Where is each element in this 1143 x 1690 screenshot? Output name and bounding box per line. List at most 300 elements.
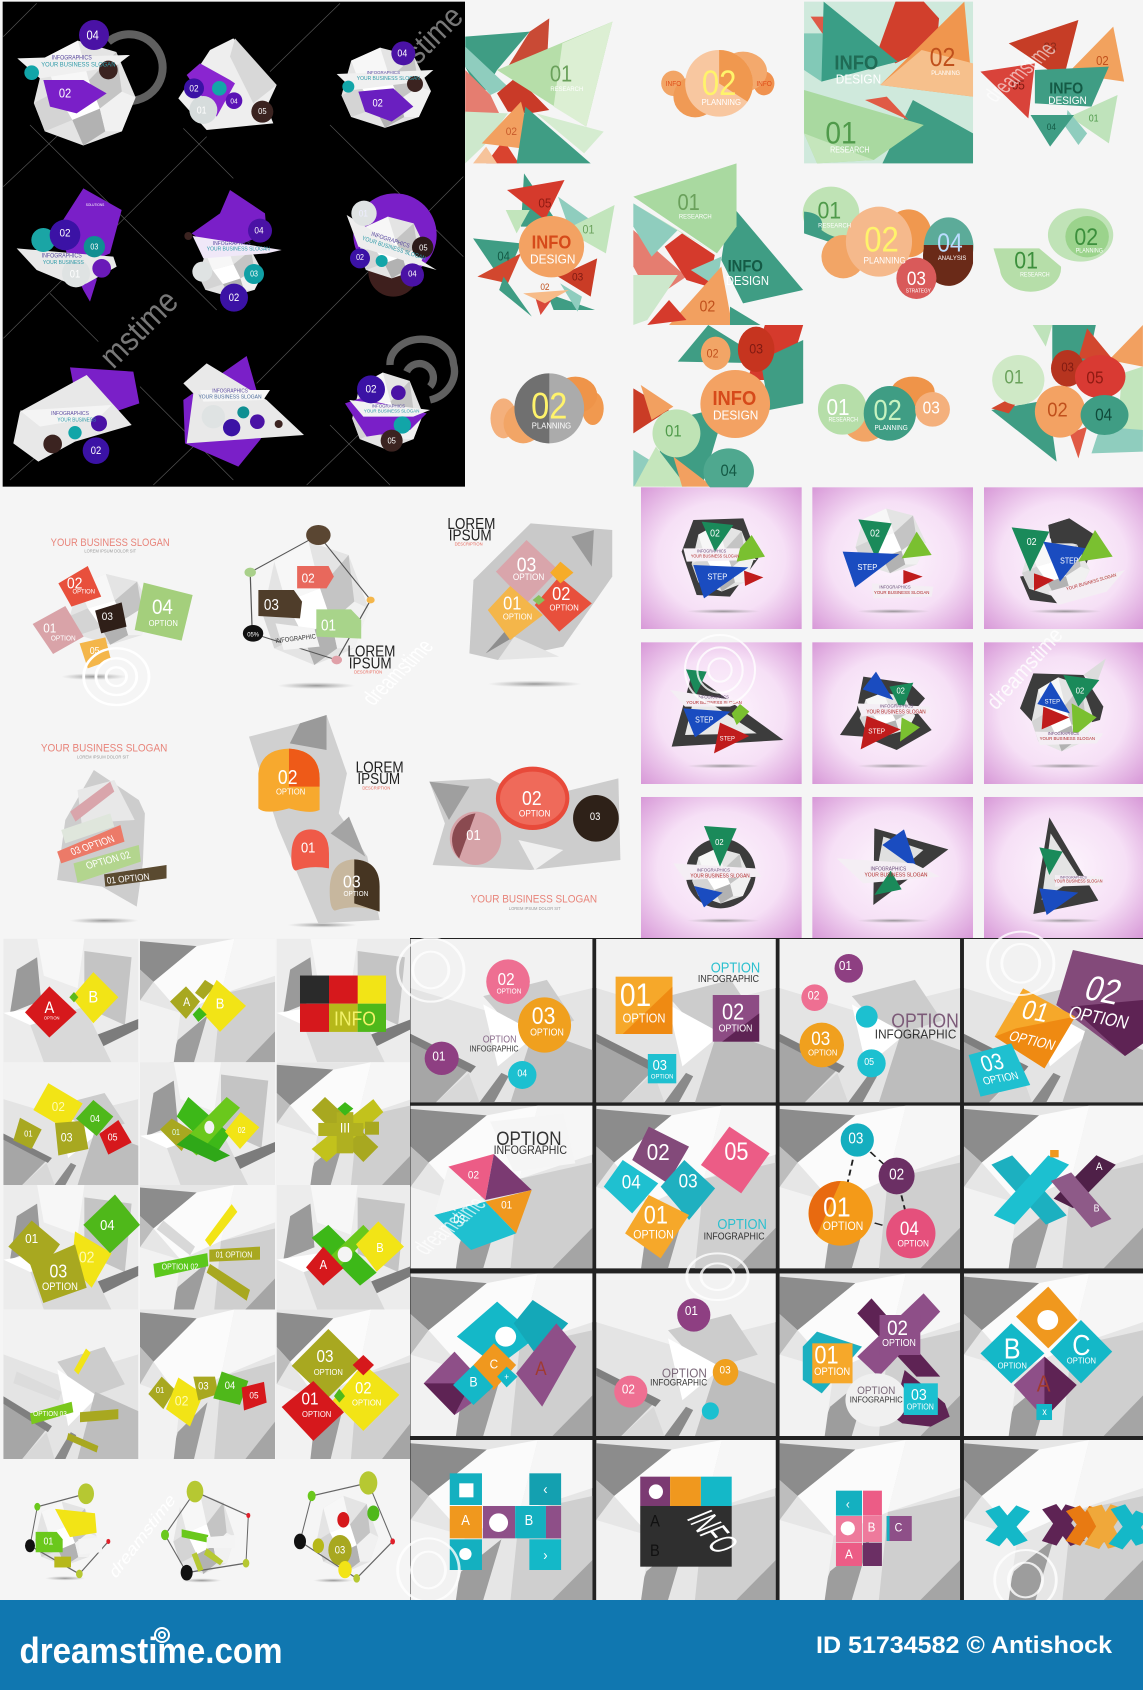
tile 1: triangles research: RESEARCH — [550, 86, 584, 93]
tile: circles pink orange: OPTION — [530, 1026, 564, 1037]
tile 4: info design scattered: INFO — [1049, 80, 1083, 98]
tile: circles pink orange: 01 — [432, 1049, 445, 1064]
tile 3: info design triangles: 02 — [930, 44, 955, 72]
group: orange badges: 01 — [301, 839, 315, 856]
cluster r1c1 — [682, 518, 765, 598]
cluster r3c2 — [837, 828, 948, 905]
bottom row networks: 01 — [43, 1535, 53, 1547]
tile: linked circles — [808, 1123, 935, 1258]
group: lorem ipsum diamonds: LOREM — [447, 516, 495, 533]
tile: linked circles: 01 — [823, 1191, 851, 1223]
tile: large olive green: 02 — [79, 1249, 94, 1267]
tile: pink block menu: C — [895, 1522, 902, 1535]
tile: scattered circles: 03 — [811, 1028, 830, 1049]
tile: squares 01 02 03: OPTION — [623, 1011, 665, 1026]
tile 10: info design circle and triangles: 04 — [721, 462, 737, 480]
cluster r2c2: 02 — [896, 686, 905, 695]
cluster 5: INFOGRAPHICS — [213, 241, 251, 247]
tile: squares 01 02 03: 02 — [722, 999, 744, 1025]
label 03: 03 — [977, 1048, 1007, 1077]
group: slogan squares: YOUR BUSINESS SLOGAN — [51, 538, 170, 549]
cluster r2c2: STEP — [868, 728, 885, 735]
logo wordmark: dreamstime.com — [20, 1630, 282, 1671]
tile 6: triangles info design: RESEARCH — [679, 213, 712, 220]
tile: squares 01 02 03 — [616, 959, 760, 1083]
cluster r1c2: INFOGRAPHICS — [879, 584, 911, 589]
group: slogan squares — [33, 538, 193, 680]
cluster 1: YOUR BUSINESS SLOGAN — [41, 61, 116, 69]
cluster r3c1 — [673, 826, 762, 908]
group: slogan squares: 01 — [43, 621, 56, 636]
cluster r1c3 — [1012, 518, 1125, 605]
tile: scattered circles: OPTION — [891, 1009, 959, 1032]
tile 10: info design circle and triangles — [633, 325, 803, 495]
tile: X with squares: 01 — [814, 1341, 839, 1369]
group: slogan squares: OPTION — [73, 588, 95, 595]
cluster r1c1: STEP — [707, 572, 728, 581]
tile 8: green circles — [993, 208, 1113, 292]
tile: row of x crosses — [992, 1507, 1143, 1547]
tile 11: circles 01 02 03 — [818, 377, 950, 442]
tile: diamonds A B C — [424, 1300, 576, 1415]
cluster 3: 02 — [372, 98, 383, 110]
cluster r2c3: INFOGRAPHICS — [1048, 731, 1079, 736]
group: hexagon network — [243, 525, 395, 689]
tile: small circles: OPTION — [662, 1366, 707, 1381]
cluster 5: 02 — [229, 293, 240, 304]
tile 9: gray planning circle — [490, 373, 604, 443]
tile: large olive green: 01 — [25, 1231, 38, 1246]
tile: diamonds with pie: OPTION — [1067, 1356, 1096, 1365]
tile: green cross: 02 — [238, 1126, 246, 1135]
tile: A B diamonds: OPTION — [44, 1015, 60, 1021]
cluster r2c3: STEP — [1045, 698, 1060, 705]
tile: diamonds A B C: A — [535, 1358, 547, 1379]
tile: scattered circles: 01 — [839, 958, 852, 973]
bottom row networks: 03 — [335, 1545, 346, 1557]
watermark diagonal: dreamstime — [979, 39, 1062, 106]
group: slogan squares: LOREM IPSUM DOLOR SIT — [84, 548, 136, 554]
tile: circles pink orange: INFOGRAPHIC — [470, 1044, 519, 1053]
tile 5: info design circle — [473, 173, 615, 317]
group: orange badges — [249, 715, 404, 928]
tile 4: info design scattered: 03 — [1044, 40, 1057, 55]
tile: linked circles: 03 — [848, 1131, 863, 1148]
tile: small squares row: 03 — [198, 1381, 209, 1393]
tile 2: planning circle: INFO — [666, 81, 682, 88]
tile 11: circles 01 02 03: RESEARCH — [828, 417, 858, 424]
tile: 01-05 squares: 02 — [52, 1099, 65, 1114]
tile: X with squares: 02 — [887, 1317, 908, 1340]
tile: INFO dark block: A — [650, 1513, 660, 1531]
tile: X with squares: OPTION — [814, 1367, 850, 1378]
tile: diamonds with pie: A — [1037, 1370, 1051, 1397]
tile 7: circles 01-04: PLANNING — [863, 255, 906, 265]
group: hexagon network: DESCRIPTION — [354, 669, 382, 674]
group: slogan squares: 04 — [152, 596, 173, 619]
tile: A B diamonds: A — [44, 999, 55, 1017]
tile: pink block menu: B — [868, 1520, 875, 1535]
cluster 6: INFOGRAPHICS — [370, 231, 411, 250]
tile 11: circles 01 02 03: PLANNING — [875, 425, 908, 432]
watermark text top right: dreamstime — [342, 0, 470, 127]
tile: diamonds with pie: B — [1004, 1333, 1021, 1365]
watermark spirals — [398, 1253, 1056, 1610]
tile 5: info design circle: DESIGN — [530, 252, 575, 267]
tile 11: circles 01 02 03: 01 — [826, 394, 850, 420]
tile 3: info design triangles: DESIGN — [836, 72, 881, 87]
tile 3: info design triangles: PLANNING — [931, 71, 960, 77]
cluster r2c1: YOUR BUSINESS SLOGAN — [686, 700, 742, 705]
tile: five tilted squares: 03 — [679, 1170, 698, 1192]
tile 12: circles on triangles: 01 — [1004, 365, 1024, 388]
tile: diamonds with pie: x — [1042, 1405, 1047, 1417]
tile: large olive green: OPTION — [42, 1282, 78, 1293]
cluster r1c1: YOUR BUSINESS SLOGAN — [691, 553, 739, 558]
tile 8: green circles: 02 — [1074, 223, 1098, 250]
tile backgrounds rows 1 2 — [410, 939, 1143, 1268]
tile: green cross: 01 — [172, 1128, 180, 1137]
cluster 4: 02 — [59, 227, 71, 240]
group: lorem ipsum diamonds: OPTION — [503, 612, 532, 621]
tile: INFO color grid: INFO — [334, 1007, 376, 1030]
cluster r2c2 — [840, 672, 932, 750]
tile: faded strips: OPTION 03 — [33, 1411, 67, 1418]
cluster 7: INFOGRAPHICS — [51, 411, 89, 417]
spiral watermark bottom — [390, 339, 454, 400]
tile: pinwheel: 01 — [501, 1199, 512, 1212]
tile 12: circles on triangles — [991, 325, 1143, 462]
watermark spiral — [84, 648, 149, 705]
tile: pinwheel: 02 — [468, 1169, 479, 1182]
tile: 01-05 squares: 04 — [90, 1112, 100, 1124]
tile: small circles: 03 — [720, 1364, 731, 1377]
tile 3: info design triangles: 01 — [825, 116, 857, 151]
cluster r1c1: INFOGRAPHICS — [697, 548, 726, 554]
group: stacked ribbons: YOUR BUSINESS SLOGAN — [41, 742, 167, 755]
cluster 2: 05 — [258, 107, 267, 116]
cluster r2c3: 02 — [1076, 686, 1085, 695]
tile: scattered circles: 05 — [864, 1055, 874, 1067]
pink tile backgrounds — [641, 487, 1143, 939]
tile: INFO dark block — [640, 1477, 747, 1567]
tile 3: info design triangles: RESEARCH — [830, 145, 869, 155]
footer banner — [0, 1600, 1143, 1690]
tile: big diamonds 01 02 03: OPTION — [352, 1398, 381, 1407]
cluster 5: 03 — [250, 269, 258, 279]
tile: circles pink orange: 02 — [498, 970, 515, 989]
tile: scattered circles — [799, 954, 959, 1077]
tile: large olive green: 03 — [50, 1261, 67, 1282]
tile 7: circles 01-04: 02 — [864, 221, 899, 260]
tile: X with squares: INFOGRAPHIC — [850, 1395, 903, 1405]
tile 4: info design scattered: 02 — [1096, 53, 1109, 68]
tile 2: planning circle: INFO — [756, 81, 772, 88]
group: hexagon network: IPSUM — [349, 656, 392, 673]
cluster 5 — [184, 190, 282, 312]
label 01 option: OPTION — [1006, 1028, 1058, 1053]
tile: circles pink orange: OPTION — [497, 988, 521, 995]
tile 7: circles 01-04: 04 — [937, 229, 963, 258]
cluster 2: 01 — [197, 104, 207, 115]
tile: X with squares — [803, 1293, 950, 1427]
tiles rows three and four — [398, 1253, 1143, 1610]
tile 7: circles 01-04: RESEARCH — [818, 222, 851, 229]
group: lorem ipsum diamonds: 02 — [552, 583, 570, 604]
cluster r1c3: STEP — [1060, 556, 1079, 565]
tile: squares 01 02 03: 03 — [653, 1056, 667, 1073]
group: hexagon network: INFOGRAPHIC — [275, 633, 317, 645]
tile: INFO color grid — [300, 976, 386, 1032]
tile: x cross: A — [1096, 1160, 1103, 1173]
panel: purple infographics on black — [3, 0, 470, 487]
group: lorem ipsum diamonds: DESCRIPTION — [455, 541, 483, 546]
cluster 3: YOUR BUSINESS SLOGAN — [357, 76, 420, 82]
tile 12: circles on triangles: 05 — [1086, 369, 1104, 388]
cluster r2c1 — [670, 669, 783, 753]
cluster 1: 04 — [86, 28, 99, 43]
dark tile gutters — [410, 938, 1143, 1600]
tile 2: planning circle — [661, 50, 774, 117]
tile: pinwheel: 03 — [453, 1214, 465, 1227]
cluster 8 — [183, 356, 304, 467]
tile: A B diamonds — [25, 972, 118, 1038]
group: red circles — [429, 767, 620, 911]
tile: X with squares: OPTION — [857, 1384, 895, 1397]
cluster 8: YOUR BUSINESS SLOGAN — [198, 394, 262, 400]
tile: five tilted squares — [604, 1127, 770, 1258]
watermark spiral — [685, 635, 755, 705]
tile 5: info design circle: 02 — [540, 282, 550, 292]
tile: tilted squares: 02 — [1079, 969, 1127, 1013]
tile: A B pie cross: B — [376, 1240, 384, 1255]
group: hexagon network: 05% — [247, 631, 259, 639]
tile 4: info design scattered: 01 — [1089, 113, 1099, 125]
panel: pink tiles with colored triangles — [641, 487, 1143, 939]
tile: 01-05 squares: 01 — [24, 1129, 33, 1139]
tile: option strips — [153, 1204, 260, 1301]
tile 2: planning circle: PLANNING — [702, 98, 741, 107]
tile 6: triangles info design: INFO — [728, 258, 763, 276]
cluster r3c1: INFOGRAPHICS — [697, 867, 730, 873]
tile: 01-05 squares: 03 — [61, 1132, 73, 1145]
tile: small squares row: 01 — [156, 1386, 165, 1395]
tile: small squares row: 02 — [175, 1393, 189, 1409]
tile 10: info design circle and triangles: 03 — [749, 341, 763, 357]
watermark diagonal: dreamstime — [982, 623, 1068, 714]
group: slogan squares: 05 — [90, 644, 100, 656]
tile: big diamonds 01 02 03: OPTION — [314, 1368, 343, 1377]
cluster 3: 04 — [397, 47, 407, 59]
tile 10: info design circle and triangles: DESIGN — [713, 408, 758, 423]
cluster 9: INFOGRAPHICS — [372, 403, 405, 408]
cluster r2c1: STEP — [720, 735, 735, 743]
tile: diamonds with pie — [980, 1287, 1112, 1420]
tile 9: gray planning circle: 02 — [531, 387, 567, 427]
group: orange badges: 02 — [278, 766, 298, 788]
tile 12: circles on triangles: 03 — [1061, 360, 1074, 375]
cluster r1c1: 02 — [710, 527, 720, 539]
tile 5: info design circle: INFO — [532, 231, 571, 253]
group: hexagon network: LOREM — [347, 644, 395, 661]
tile: teal block menu — [450, 1473, 561, 1570]
tile: large olive green — [8, 1195, 140, 1303]
tile: X with squares: 03 — [911, 1386, 927, 1404]
cluster 2: 04 — [230, 98, 238, 105]
tile: A B pie cross — [306, 1221, 404, 1286]
cluster 2 — [178, 38, 277, 130]
tile: linked circles: 02 — [889, 1167, 904, 1184]
tile 1: triangles research: 01 — [550, 62, 572, 87]
group: red circles: 02 — [522, 787, 542, 809]
group: slogan squares: 03 — [102, 610, 113, 623]
tile: small circles: 02 — [622, 1382, 635, 1397]
tile: diamonds A B C: C — [490, 1357, 498, 1372]
panel: yellow green red gray tiles — [3, 939, 412, 1583]
tile 6: triangles info design: 01 — [677, 190, 700, 215]
tile 6: triangles info design — [633, 163, 803, 325]
group: orange badges: DESCRIPTION — [362, 785, 390, 790]
cluster 6 — [347, 193, 437, 297]
cluster 1: INFOGRAPHICS — [52, 55, 92, 61]
tile: small squares row — [148, 1371, 267, 1427]
tiles rows one and two — [398, 932, 1143, 1268]
tile: small circles — [614, 1298, 738, 1420]
tile: big diamonds 01 02 03: OPTION — [302, 1410, 331, 1419]
tile: small squares row: 04 — [225, 1380, 236, 1392]
tile: A B pie cross: A — [320, 1257, 327, 1272]
tile: pink block menu — [836, 1491, 912, 1566]
panel: green-orange-red paper shapes — [465, 2, 1143, 495]
cluster 8: INFOGRAPHICS — [212, 388, 248, 395]
tile 6: triangles info design: DESIGN — [726, 273, 769, 288]
tile: diamonds with pie: OPTION — [998, 1361, 1027, 1370]
cluster r2c3 — [1020, 658, 1106, 751]
tile: circles pink orange: OPTION — [483, 1033, 517, 1045]
cluster 6: 05 — [419, 243, 428, 253]
tile: five tilted squares: 05 — [724, 1138, 749, 1165]
tile: pinwheel — [434, 1113, 575, 1250]
cluster 4: SOLUTIONS — [86, 203, 105, 207]
cluster r3c3: INFOGRAPHICS — [1060, 875, 1087, 879]
tile: teal block menu: B — [525, 1511, 533, 1528]
group: hexagon network: 02 — [302, 571, 315, 586]
cluster 4: YOUR BUSINESS — [43, 260, 84, 266]
cluster r1c2 — [843, 508, 933, 598]
group: red circles: OPTION — [519, 808, 550, 819]
group: slogan squares: OPTION — [51, 635, 76, 643]
tile: big diamonds 01 02 03: 01 — [302, 1390, 318, 1409]
cluster 9: YOUR BUSINESS SLOGAN — [364, 408, 419, 414]
group: stacked ribbons: LOREM IPSUM DOLOR SIT — [77, 754, 129, 760]
group: lorem ipsum diamonds: OPTION — [513, 572, 544, 582]
image credit: ID 51734582 © Antishock — [816, 1632, 1113, 1659]
cluster 9: 05 — [387, 436, 396, 445]
watermark spiral — [398, 932, 1054, 1002]
cluster 7: YOUR BUSINESS — [57, 417, 97, 424]
tile: A B diamonds: B — [88, 988, 98, 1007]
tile: x cross: B — [1094, 1202, 1100, 1214]
tile: scattered circles: INFOGRAPHIC — [875, 1027, 956, 1042]
tile: olive A yellow B: A — [183, 997, 191, 1009]
tile: scattered circles: 02 — [808, 990, 820, 1003]
tile 12: circles on triangles: 02 — [1047, 399, 1068, 422]
tile: olive cross — [312, 1097, 383, 1162]
tile: diamonds with pie: C — [1072, 1330, 1091, 1361]
group: red circles: 03 — [590, 812, 601, 823]
tile 3: info design triangles — [804, 2, 973, 163]
cluster 4 — [17, 188, 122, 302]
tile: five tilted squares: 02 — [647, 1139, 670, 1165]
cluster 3 — [337, 41, 433, 128]
tile 10: info design circle and triangles: 01 — [665, 423, 682, 441]
tile 4: info design scattered — [980, 20, 1124, 147]
tile 11: circles 01 02 03: 03 — [923, 399, 940, 418]
cluster r2c2: YOUR BUSINESS SLOGAN — [866, 709, 926, 715]
tile: big diamonds 01 02 03 — [282, 1329, 399, 1441]
cluster r1c3: 02 — [1027, 535, 1037, 547]
tile: linked circles: OPTION — [823, 1220, 863, 1233]
ribbon label 02: OPTION 02 — [84, 850, 132, 872]
tile 5: info design circle: 01 — [583, 224, 594, 237]
tile: small circles: 01 — [685, 1303, 698, 1318]
group: lorem ipsum diamonds: 03 — [517, 554, 536, 576]
tile 7: circles 01-04: STRATEGY — [906, 288, 931, 294]
tile: squares 01 02 03: OPTION — [711, 959, 760, 976]
logo spiral icon — [155, 1628, 169, 1642]
group: lorem ipsum diamonds: 01 — [503, 592, 521, 614]
tile 6: triangles info design: 02 — [699, 298, 715, 316]
cluster r3c1: YOUR BUSINESS SLOGAN — [690, 873, 750, 879]
cluster 9: 02 — [365, 383, 377, 396]
tile: diamonds A B C: + — [504, 1372, 509, 1382]
watermark diagonal: dreamstime — [106, 1489, 178, 1582]
group: orange badges: 03 — [343, 871, 361, 892]
tile 3: info design triangles: INFO — [834, 51, 878, 75]
cluster r2c1: STEP — [695, 715, 714, 725]
tile: pink block menu: ‹ — [846, 1497, 850, 1512]
tile: linked circles: OPTION — [897, 1238, 929, 1249]
tile: small circles: INFOGRAPHIC — [650, 1377, 707, 1387]
cluster 5: 04 — [254, 225, 264, 235]
panel: business slogan paper shapes — [33, 516, 620, 928]
tile 7: circles 01-04: ANALYSIS — [938, 255, 966, 262]
slogan: YOUR BUSINESS SLOGAN — [361, 236, 426, 262]
tile: circles pink orange — [425, 959, 571, 1089]
cluster 1: 02 — [59, 86, 72, 101]
tile: pinwheel: INFOGRAPHIC — [494, 1144, 567, 1157]
tile 8: green circles: PLANNING — [1076, 248, 1103, 254]
gray low-poly tile backgrounds — [3, 939, 412, 1459]
cluster 2: 02 — [189, 83, 199, 94]
cluster 7: 02 — [91, 446, 102, 457]
tile: teal block menu: › — [543, 1546, 548, 1563]
cluster 9 — [345, 372, 430, 452]
cluster r2c1: INFOGRAPHICS — [698, 694, 729, 699]
tile: olive A yellow B — [170, 980, 246, 1032]
group: lorem ipsum diamonds: OPTION — [549, 603, 579, 613]
tile 8: green circles: 01 — [1014, 246, 1038, 274]
cluster 6: 02 — [356, 253, 364, 262]
cluster r3c1: 02 — [715, 838, 724, 847]
cluster r3c2: YOUR BUSINESS SLOGAN — [864, 872, 928, 879]
group: slogan squares: OPTION — [149, 619, 178, 628]
group: stacked ribbons — [41, 742, 167, 924]
tile: squares 01 02 03: 01 — [620, 978, 651, 1013]
panel: teal purple orange pink tiles — [398, 932, 1143, 1610]
tile 1: triangles research: 02 — [506, 125, 517, 138]
tile: squares 01 02 03: OPTION — [651, 1073, 674, 1080]
